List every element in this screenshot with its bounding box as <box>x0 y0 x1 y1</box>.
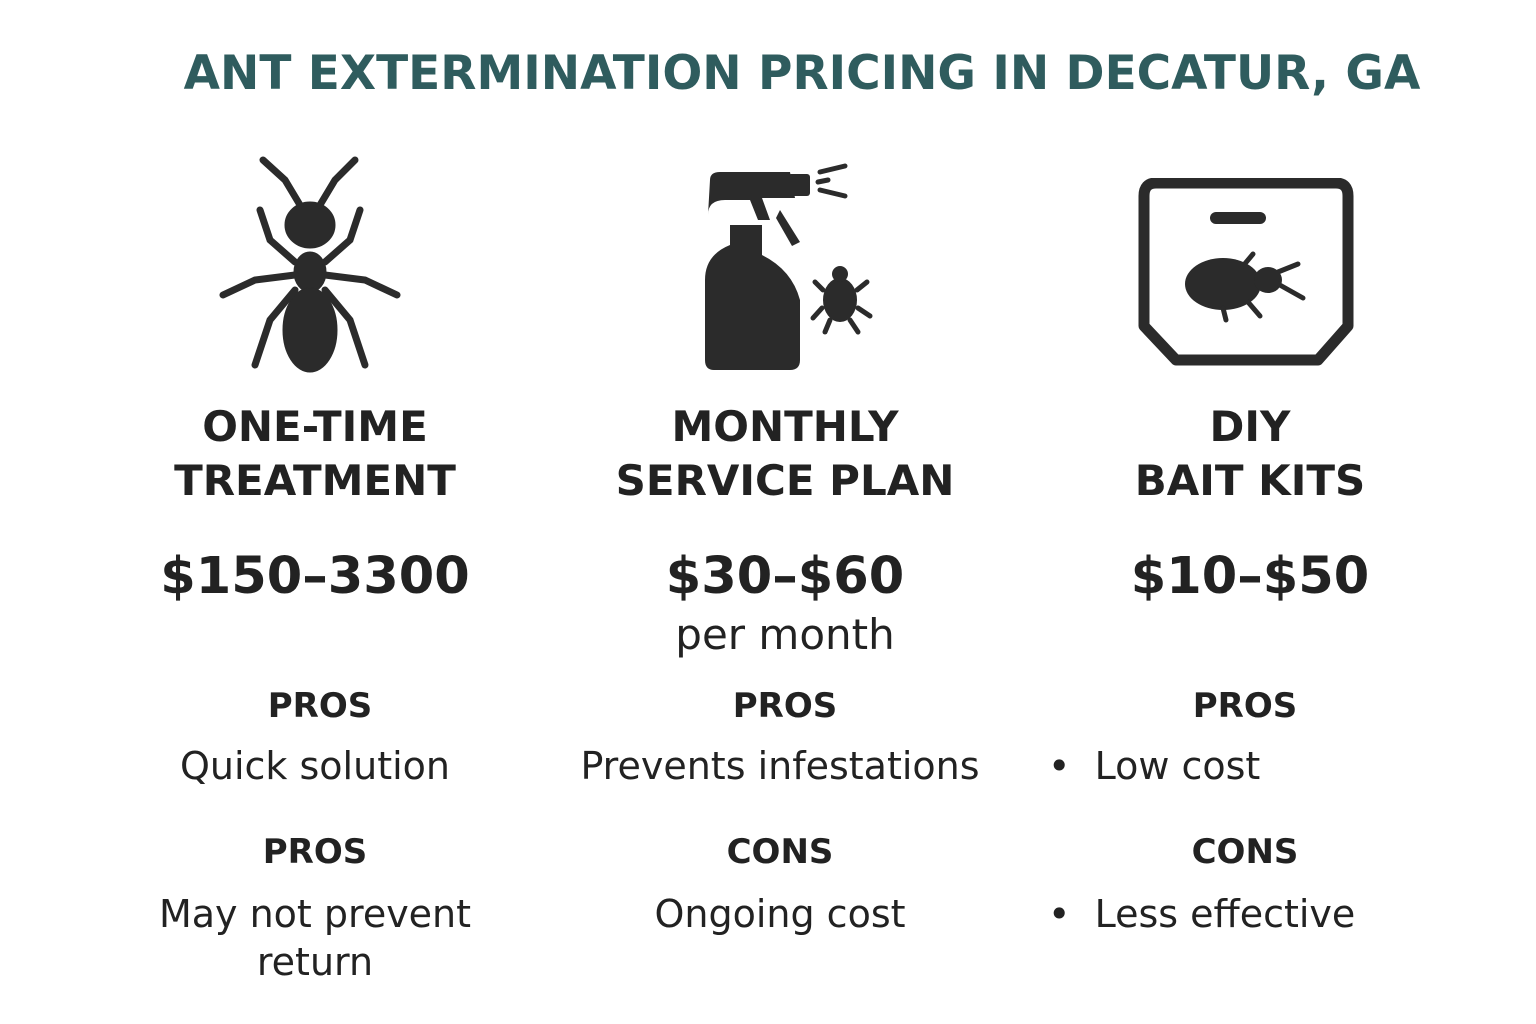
cons text 2: Ongoing cost <box>654 892 906 936</box>
pros text 2: Prevents infestations <box>580 744 980 788</box>
column: monthly plan heading: MONTHLY <box>671 402 899 451</box>
cons text 1: return <box>257 940 373 984</box>
column: DIY heading: DIY <box>1210 402 1290 451</box>
pros text 1: Quick solution <box>180 744 450 788</box>
cons label 1: PROS <box>263 832 367 872</box>
price: one-time: $150–3300 <box>160 547 470 606</box>
price: monthly: $30–$60 <box>666 547 904 606</box>
pros label 3: PROS <box>1193 686 1297 726</box>
column: monthly plan heading: SERVICE PLAN <box>616 456 954 505</box>
icon: spray bottle <box>705 164 872 370</box>
cons label 2: CONS <box>727 832 833 872</box>
per month: per month <box>675 610 895 659</box>
icon: ant <box>220 156 400 372</box>
column: one-time treatment <box>174 402 456 505</box>
pros label 1: PROS <box>268 686 372 726</box>
cons text 3: • Less effective <box>1048 892 1355 936</box>
heading <box>174 402 456 505</box>
title: ANT EXTERMINATION PRICING IN DECATUR, GA <box>184 46 1420 101</box>
column: DIY heading: BAIT KITS <box>1135 456 1365 505</box>
pros label 2: PROS <box>733 686 837 726</box>
heading: TREATMENT <box>174 456 456 505</box>
column: DIY heading <box>1135 402 1365 505</box>
cons label 3: CONS <box>1192 832 1298 872</box>
cons text 1: May not prevent <box>159 892 471 936</box>
cons text 1 <box>159 892 471 984</box>
heading: ONE-TIME <box>202 402 428 451</box>
price: DIY: $10–$50 <box>1131 547 1369 606</box>
icon: bait box <box>1138 178 1354 366</box>
column: monthly plan heading <box>616 402 954 505</box>
pros text 3: • Low cost <box>1048 744 1260 788</box>
